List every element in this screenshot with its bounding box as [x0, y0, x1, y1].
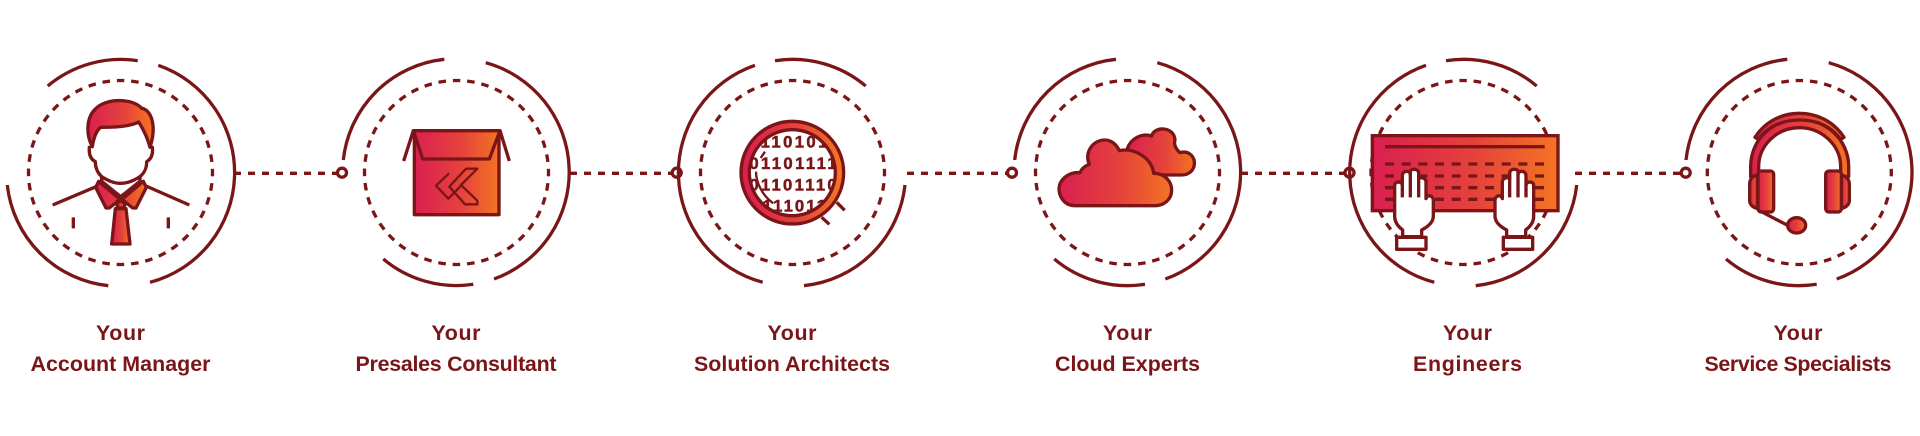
label: your engineers: Your: [1443, 321, 1492, 345]
panel: account manager: [7, 59, 235, 376]
label: your service specialists: Your: [1774, 321, 1822, 345]
label: your engineers: Engineers: [1413, 352, 1522, 376]
icon: open box with logo: [404, 131, 509, 215]
connector: presales consultant to solution architects: [570, 168, 681, 177]
icon: headset: [1750, 113, 1849, 233]
panel: cloud experts: [1015, 59, 1241, 376]
label: your presales consultant: Presales Consultant: [356, 352, 556, 376]
icon: hands on keyboard: [1372, 136, 1558, 249]
label: your presales consultant: Your: [432, 321, 480, 345]
icon: magnifying glass over binary: 01101110: [749, 175, 837, 194]
panel: engineers: [1350, 59, 1577, 376]
connector: cloud experts to engineers: [1241, 168, 1354, 177]
ring: presales consultant: [343, 59, 569, 286]
panel: solution architects: [678, 59, 905, 376]
connector: account manager to presales consultant: [234, 168, 346, 177]
label: your service specialists: Service Specialists: [1704, 352, 1892, 376]
icon: clouds: [1059, 129, 1194, 206]
icon: magnifying glass over binary: 01101111: [749, 154, 837, 173]
label: your cloud experts: Your: [1103, 321, 1152, 345]
panel: service specialists: [1686, 59, 1912, 376]
label: your solution architects: Your: [768, 321, 816, 345]
ring: cloud experts: [1015, 59, 1241, 286]
label: your account manager: Account Manager: [30, 352, 210, 376]
ring: service specialists: [1686, 59, 1912, 286]
connector: solution architects to cloud experts: [907, 168, 1016, 177]
connector: engineers to service specialists: [1575, 168, 1690, 177]
panel: presales consultant: [343, 59, 569, 376]
label: your solution architects: Solution Architects: [694, 352, 890, 376]
ring: solution architects: [678, 59, 905, 286]
icon: magnifying glass over binary: 111011: [763, 197, 826, 216]
label: your account manager: Your: [96, 321, 145, 345]
icon: magnifying glass over binary: [741, 121, 845, 224]
icon: magnifying glass over binary: 110101: [761, 132, 827, 151]
ring: account manager: [7, 59, 235, 286]
label: your cloud experts: Cloud Experts: [1055, 352, 1200, 376]
icon: businessman: [53, 101, 189, 244]
ring: engineers: [1350, 59, 1577, 286]
